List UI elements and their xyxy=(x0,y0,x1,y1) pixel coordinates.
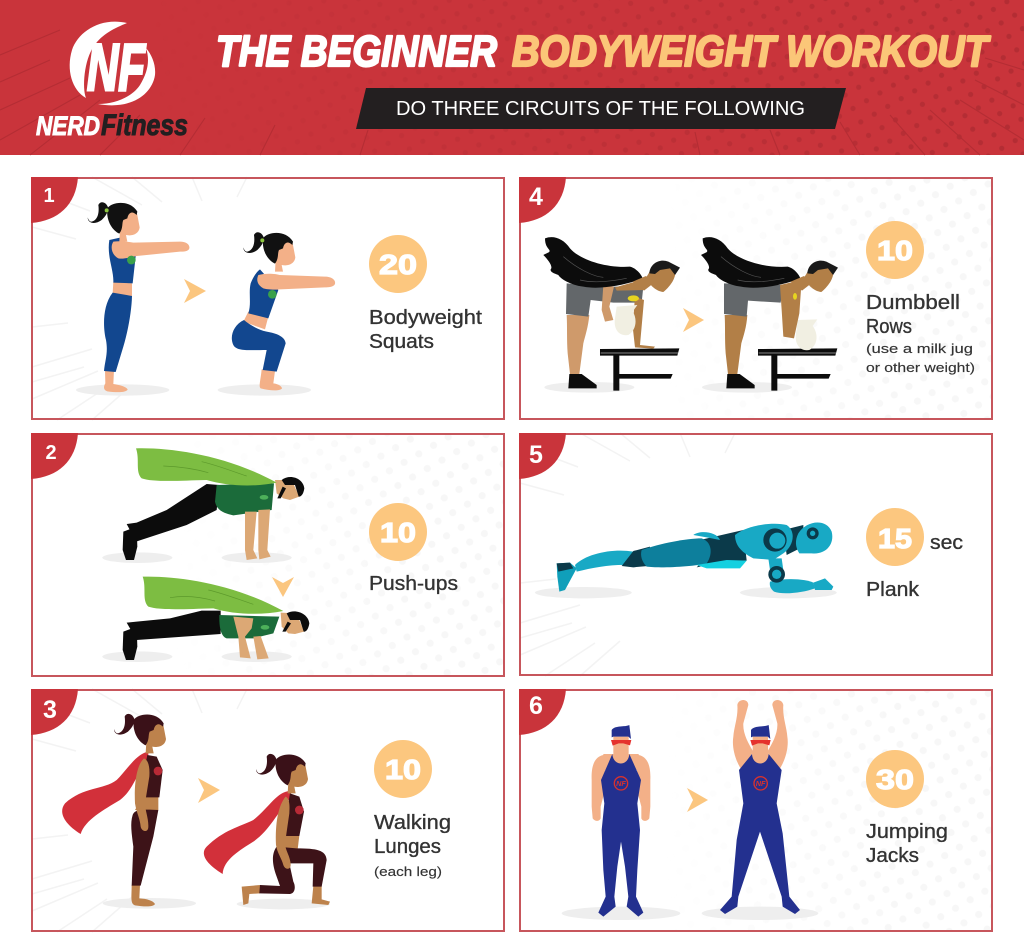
label: Squats xyxy=(369,331,434,353)
number tab 5: 5 xyxy=(529,441,543,469)
logo mark: NF xyxy=(87,30,146,104)
figure: lunge xyxy=(204,754,330,909)
title: THE BEGINNER xyxy=(216,27,497,76)
label: Jumping xyxy=(866,821,948,843)
logo xyxy=(36,22,188,142)
figure: arm down xyxy=(543,237,680,393)
figure: arm up xyxy=(701,237,838,393)
subtitle ribbon: DO THREE CIRCUITS OF THE FOLLOWING xyxy=(396,98,805,120)
count 10: 10 xyxy=(380,517,416,548)
note: or other weight) xyxy=(866,360,975,375)
number tab 3 xyxy=(31,689,78,735)
arrow xyxy=(198,778,220,803)
number tab 3: 3 xyxy=(43,696,57,724)
label: Lunges xyxy=(374,836,441,858)
arrow xyxy=(683,308,704,332)
label: Dumbbell xyxy=(866,292,960,314)
chest logo: NF xyxy=(616,779,626,788)
chest logo: NF xyxy=(756,779,766,788)
panel 1: bodyweight squats xyxy=(31,177,504,420)
panel 4: dumbbell rows xyxy=(519,177,992,419)
number tab 6: 6 xyxy=(529,692,543,720)
unit: sec xyxy=(930,532,963,554)
number tab 2: 2 xyxy=(45,442,57,464)
figure: push-up top xyxy=(102,448,304,563)
panel 3: walking lunges xyxy=(31,689,504,932)
panel 5: plank xyxy=(519,433,992,676)
count 15 xyxy=(866,508,924,566)
number tab 1: 1 xyxy=(43,185,55,207)
panel 6: jumping jacks xyxy=(519,689,992,931)
figure: push-up bottom xyxy=(102,577,309,662)
number tab 2 xyxy=(31,433,78,479)
label: Push-ups xyxy=(369,573,458,595)
chest logo xyxy=(754,777,767,790)
arrow xyxy=(184,279,206,303)
number tab 5 xyxy=(519,433,566,479)
count 10: 10 xyxy=(877,235,913,266)
count 30 xyxy=(866,750,924,808)
number tab 4: 4 xyxy=(529,183,543,211)
number tab 1 xyxy=(31,177,78,223)
count 10 xyxy=(369,503,427,561)
number tab 6 xyxy=(519,689,566,735)
count 20 xyxy=(369,235,427,293)
count 30: 30 xyxy=(876,764,914,795)
figure: standing with cape xyxy=(62,714,196,909)
figure: squat xyxy=(218,232,335,396)
figure: arms up xyxy=(702,700,818,920)
arrow xyxy=(687,788,708,812)
panel 2: push-ups xyxy=(31,433,504,676)
count 10 xyxy=(866,221,924,279)
chest logo xyxy=(614,777,628,790)
logo wordmark: NERD xyxy=(36,111,100,141)
note: (each leg) xyxy=(374,864,442,879)
logo wordmark: Fitness xyxy=(101,109,188,142)
label: Walking xyxy=(374,812,451,834)
note: (use a milk jug xyxy=(866,341,973,356)
count 10 xyxy=(374,740,432,798)
arrow down xyxy=(272,577,294,597)
number tab 4 xyxy=(519,177,566,223)
label: Jacks xyxy=(866,845,919,867)
count 15: 15 xyxy=(878,523,912,554)
label: Plank xyxy=(866,579,920,601)
figure: arms down xyxy=(562,725,680,920)
subtitle ribbon xyxy=(356,88,846,129)
count 20: 20 xyxy=(379,249,417,280)
label: Rows xyxy=(866,316,912,338)
label: Bodyweight xyxy=(369,307,482,329)
count 10: 10 xyxy=(385,754,421,785)
logo mark xyxy=(70,22,155,105)
figure: standing xyxy=(76,202,189,396)
header banner xyxy=(0,0,1024,155)
figure: robot plank xyxy=(535,522,837,598)
